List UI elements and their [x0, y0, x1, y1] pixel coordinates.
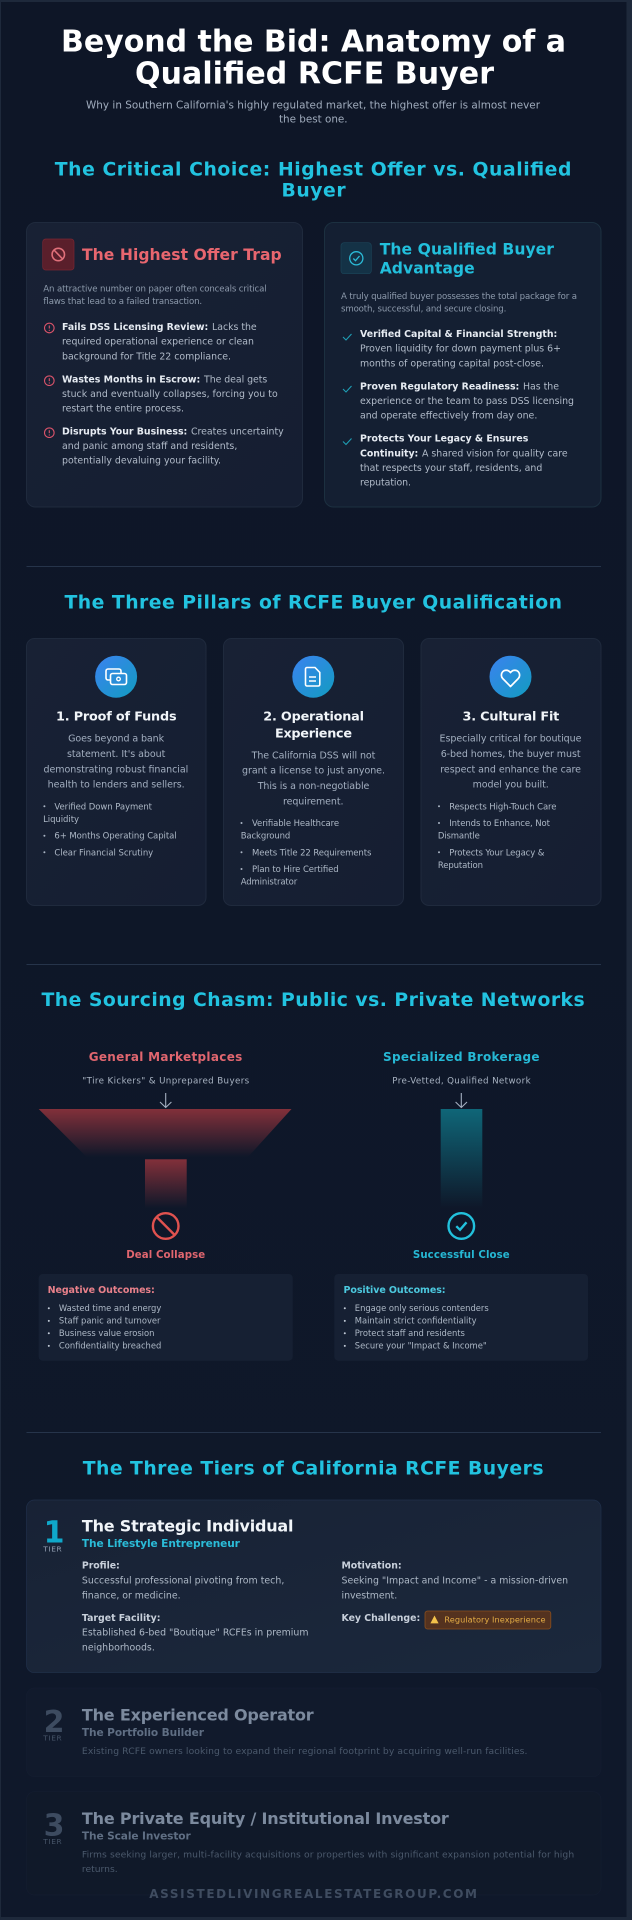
list item: wastes months in escrow: The deal gets: [203, 374, 267, 385]
arrow: down: [160, 1093, 171, 1108]
tier number: TIER: [42, 1734, 62, 1743]
icon: ban: [43, 239, 74, 270]
pillar list: Plan to Hire Certified: [252, 865, 339, 875]
positive outcomes box: [334, 1274, 588, 1361]
icon: heart: [490, 656, 532, 698]
title: [61, 25, 566, 91]
pillar description: respect and enhance the care: [440, 764, 581, 775]
channel subheading: Pre-Vetted, Qualified Network: [392, 1077, 531, 1087]
tier heading: The Scale Investor: [82, 1830, 191, 1842]
tier description: returns.: [82, 1864, 118, 1875]
profile: Profile:: [82, 1561, 120, 1572]
list item: wastes months in escrow: Wastes Months in Escrow:: [62, 374, 200, 385]
pillar description: requirement.: [283, 796, 344, 807]
pillar list: Clear Financial Scrutiny: [54, 848, 153, 858]
pillar heading: [263, 710, 364, 741]
outcome label: Deal Collapse: [126, 1250, 205, 1261]
profile: [82, 1561, 284, 1601]
motivation: [342, 1561, 568, 1601]
title: Qualified RCFE Buyer: [135, 56, 494, 91]
target facility: Established 6-bed "Boutique" RCFEs in premium: [82, 1628, 309, 1639]
tier description: Existing RCFE owners looking to expand their regional footprint by acquiring well-run facilities.: [82, 1746, 527, 1757]
panel: tier 2 experienced operator: [26, 1688, 601, 1777]
negative outcomes box: [39, 1274, 293, 1361]
card description: A truly qualified buyer possesses the total package for a: [341, 292, 577, 302]
panel: specialized brokerage channel: [334, 1050, 588, 1361]
motivation: Seeking "Impact and Income" - a mission-driven: [342, 1576, 568, 1587]
tier heading: [82, 1516, 294, 1550]
tier heading: The Experienced Operator: [82, 1706, 314, 1725]
tier number: 3: [44, 1809, 64, 1844]
pillar list: Verifiable Healthcare: [252, 819, 339, 829]
footer: ASSISTEDLIVINGREALESTATEGROUP.COM: [149, 1887, 477, 1901]
motivation: investment.: [342, 1590, 397, 1601]
card description: [43, 285, 267, 307]
funnel heading: General Marketplaces: [89, 1050, 242, 1064]
negative outcomes box: Confidentiality breached: [59, 1341, 161, 1351]
tier number: 2: [44, 1705, 64, 1740]
pillar description: [44, 734, 188, 791]
outcome label: Successful Close: [413, 1250, 510, 1261]
channel bar: [441, 1109, 482, 1208]
negative outcomes box: Business value erosion: [59, 1328, 154, 1338]
pillar list: [438, 802, 556, 871]
negative outcomes box: Staff panic and turnover: [59, 1316, 161, 1326]
badge: regulatory inexperience: Regulatory Inexperience: [444, 1615, 546, 1625]
list item: proven regulatory readiness: Has the: [523, 381, 559, 392]
panel: tier 1 strategic individual: [26, 1500, 601, 1673]
card heading: [380, 240, 554, 277]
heading: three pillars: The Three Pillars of RCFE Buyer Qualification: [64, 593, 562, 614]
arrow: down: [456, 1093, 467, 1108]
list item: verified capital: Verified Capital & Financial Strength:: [360, 329, 557, 340]
target facility: Target Facility:: [82, 1613, 160, 1624]
list item: protects your legacy: A shared vision for quality care: [422, 448, 568, 459]
pillar description: Especially critical for boutique: [440, 734, 582, 745]
list item: fails DSS licensing review: background for Title 22 compliance.: [62, 351, 231, 362]
title: Beyond the Bid: Anatomy of a: [61, 25, 566, 60]
pillar heading: 3. Cultural Fit: [462, 710, 559, 725]
badge: regulatory inexperience: [425, 1611, 551, 1629]
channel heading: Specialized Brokerage: [383, 1050, 540, 1064]
pillar list: Verified Down Payment: [54, 802, 153, 812]
list item: protects your legacy: Protects Your Legacy & Ensures: [360, 434, 529, 445]
panel: general marketplaces funnel: [39, 1050, 293, 1361]
pillar list: Intends to Enhance, Not: [449, 819, 551, 829]
pillar description: Goes beyond a bank: [68, 734, 165, 745]
tier number: 1: [44, 1516, 64, 1551]
list item: protects your legacy: that respects your staff, residents, and: [360, 463, 542, 474]
pillar description: statement. It's about: [67, 749, 166, 760]
pillar description: This is a non-negotiable: [257, 781, 370, 792]
heading: the critical choice: [55, 160, 571, 202]
card description: flaws that lead to a failed transaction.: [43, 297, 202, 307]
heading: sourcing chasm: The Sourcing Chasm: Public vs. Private Networks: [42, 990, 585, 1011]
card heading: The Highest Offer Trap: [82, 246, 282, 264]
subtitle: the best one.: [279, 114, 348, 126]
key challenge: [342, 1611, 551, 1629]
panel: tier 3 private equity: [26, 1792, 601, 1895]
target facility: [82, 1613, 309, 1653]
pillar list: Administrator: [241, 878, 298, 888]
positive outcomes box: Protect staff and residents: [355, 1328, 465, 1338]
funnel shape: [39, 1109, 292, 1208]
list item: wastes months in escrow: [44, 374, 278, 414]
negative outcomes box: Negative Outcomes:: [48, 1285, 155, 1296]
pillar list: Dismantle: [438, 832, 480, 842]
pillar list: Liquidity: [43, 815, 79, 825]
pillar description: [440, 734, 582, 791]
list item: proven regulatory readiness: and operate effectively from day one.: [360, 411, 537, 422]
list item: disrupts your business: and panic among staff and residents,: [62, 441, 237, 452]
heading: the critical choice: The Critical Choice: Highest Offer vs. Qualified: [55, 160, 571, 181]
pillar description: health to lenders and sellers.: [48, 780, 185, 791]
list item: disrupts your business: Creates uncertainty: [191, 426, 284, 437]
positive outcomes box: Maintain strict confidentiality: [355, 1316, 477, 1326]
list item: proven regulatory readiness: Proven Regulatory Readiness:: [360, 381, 519, 392]
list item: fails DSS licensing review: required operational experience or clean: [62, 337, 254, 348]
list item: disrupts your business: Disrupts Your Business:: [62, 426, 187, 437]
tier number: TIER: [42, 1837, 62, 1846]
list item: verified capital: months of operating capital post-close.: [360, 359, 544, 370]
panel: pillar 3 cultural fit: [421, 638, 601, 906]
pillar heading: 1. Proof of Funds: [56, 710, 177, 725]
pillar description: The California DSS will not: [251, 750, 376, 761]
icon: check circle: [448, 1213, 474, 1239]
motivation: Motivation:: [342, 1561, 402, 1572]
panel: the qualified buyer advantage: [324, 222, 601, 507]
panel: pillar 2 operational experience: [224, 638, 404, 906]
list item: protects your legacy: [343, 434, 568, 489]
pillar list: Reputation: [438, 861, 483, 871]
list item: wastes months in escrow: restart the entire process.: [62, 403, 184, 414]
tier description: Firms seeking larger, multi-facility acquisitions or properties with significant expansion potential for high: [82, 1849, 574, 1860]
list item: protects your legacy: reputation.: [360, 478, 411, 489]
list item: fails DSS licensing review: Lacks the: [212, 322, 257, 333]
list item: protects your legacy: Continuity:: [360, 448, 418, 459]
card heading: Advantage: [380, 259, 475, 277]
profile: finance, or medicine.: [82, 1590, 181, 1601]
pillar list: [240, 819, 372, 888]
tier heading: [82, 1809, 449, 1842]
panel: pillar 1 proof of funds: [26, 638, 206, 906]
pillar list: Protects Your Legacy &: [449, 848, 545, 858]
pillar list: Meets Title 22 Requirements: [252, 848, 372, 858]
key challenge: Key Challenge:: [342, 1613, 420, 1624]
subtitle: [86, 99, 541, 126]
card description: An attractive number on paper often conceals critical: [43, 285, 267, 295]
icon: money: [95, 656, 137, 698]
negative outcomes box: Wasted time and energy: [59, 1303, 161, 1313]
subtitle: Why in Southern California's highly regulated market, the highest offer is almost never: [86, 99, 541, 111]
list item: wastes months in escrow: stuck and eventually collapses, forcing you to: [62, 389, 278, 400]
positive outcomes box: Secure your "Impact & Income": [355, 1341, 487, 1351]
pillar list: Respects High-Touch Care: [449, 802, 556, 812]
tier heading: The Private Equity / Institutional Investor: [82, 1809, 449, 1828]
list item: fails DSS licensing review: Fails DSS Licensing Review:: [62, 322, 208, 333]
list item: proven regulatory readiness: [343, 381, 574, 422]
pillar description: model you built.: [473, 780, 549, 791]
list item: proven regulatory readiness: experience or the team to pass DSS licensing: [360, 396, 574, 407]
pillar description: demonstrating robust financial: [44, 764, 188, 775]
list item: verified capital: [343, 329, 561, 370]
profile: Successful professional pivoting from tech,: [82, 1576, 284, 1587]
list item: verified capital: Proven liquidity for down payment plus 6+: [360, 344, 561, 355]
icon: prohibited: [153, 1213, 178, 1239]
pillar list: [43, 802, 177, 858]
card description: smooth, successful, and secure closing.: [341, 304, 506, 314]
pillar heading: 2. Operational: [263, 710, 364, 725]
card heading: The Qualified Buyer: [380, 240, 554, 258]
tier heading: The Portfolio Builder: [82, 1727, 205, 1739]
heading: the critical choice: Buyer: [282, 181, 346, 202]
positive outcomes box: Engage only serious contenders: [355, 1303, 489, 1313]
pillar description: 6-bed homes, the buyer must: [441, 749, 581, 760]
positive outcomes box: Positive Outcomes:: [344, 1285, 446, 1296]
pillar heading: Experience: [275, 726, 352, 741]
tier heading: The Strategic Individual: [82, 1516, 294, 1535]
pillar description: [242, 750, 385, 807]
pillar list: Background: [241, 832, 290, 842]
tier heading: The Lifestyle Entrepreneur: [82, 1538, 241, 1550]
heading: three tiers: The Three Tiers of California RCFE Buyers: [83, 1458, 543, 1479]
list item: disrupts your business: potentially devaluing your facility.: [62, 456, 221, 467]
list item: disrupts your business: [44, 426, 284, 467]
funnel subheading: "Tire Kickers" & Unprepared Buyers: [82, 1077, 250, 1087]
card description: [341, 292, 577, 314]
tier description: [82, 1849, 574, 1875]
icon: circle check: [341, 243, 371, 274]
tier number: TIER: [42, 1545, 62, 1554]
icon: document: [292, 656, 334, 698]
pillar list: 6+ Months Operating Capital: [54, 832, 177, 842]
pillar description: grant a license to just anyone.: [242, 766, 385, 777]
list item: fails DSS licensing review: [44, 322, 257, 362]
tier heading: [82, 1706, 314, 1739]
target facility: neighborhoods.: [82, 1642, 155, 1653]
panel: the highest offer trap: [26, 222, 302, 507]
